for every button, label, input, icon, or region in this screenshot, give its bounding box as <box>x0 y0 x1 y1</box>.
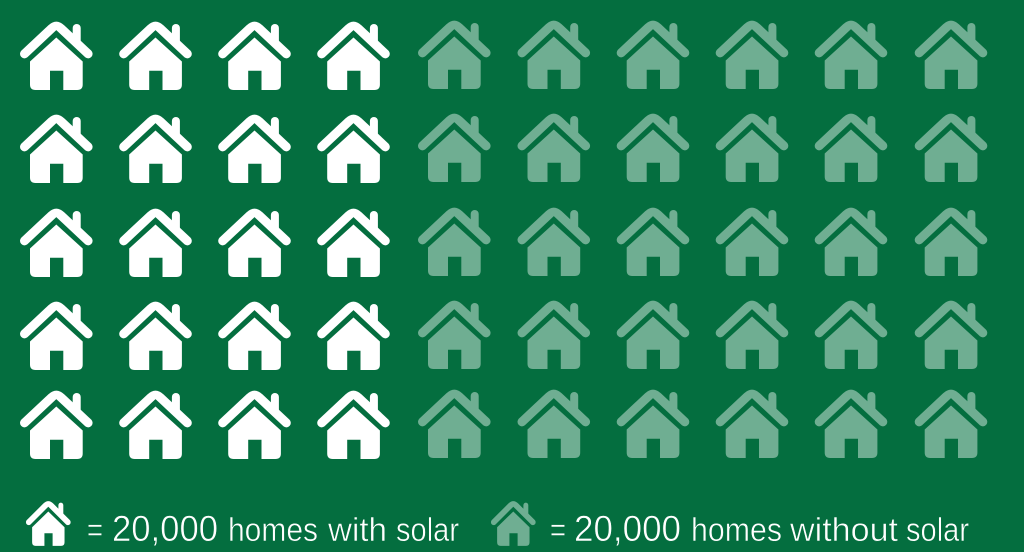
row 2 white houses <box>20 115 390 183</box>
legend label: with solar: 20,000 <box>112 508 218 549</box>
legend label: without solar: homes <box>691 511 782 548</box>
legend label: with solar: solar <box>396 511 459 548</box>
row 5 faded houses <box>418 390 987 458</box>
legend label: with solar: homes <box>228 511 318 548</box>
legend icon: home without solar <box>491 501 536 546</box>
row 1 white houses <box>20 22 390 90</box>
legend label: without solar <box>550 508 969 549</box>
row 4 white houses <box>20 302 390 370</box>
row 2 faded houses <box>418 114 987 182</box>
row 3 white houses <box>20 209 390 277</box>
legend label: with solar: with <box>327 511 387 548</box>
legend label: with solar <box>87 508 459 549</box>
icon grid: homes without solar <box>418 21 987 458</box>
row 3 faded houses <box>418 208 987 276</box>
icon grid: homes with solar <box>20 22 390 459</box>
legend label: with solar: = <box>87 511 103 548</box>
legend label: without solar: solar <box>906 511 969 548</box>
row 1 faded houses <box>418 21 987 89</box>
legend label: without solar: 20,000 <box>574 508 681 549</box>
row 5 white houses <box>20 391 390 459</box>
row 4 faded houses <box>418 301 987 369</box>
legend label: without solar: without <box>789 511 898 548</box>
legend icon: home with solar <box>26 501 71 546</box>
legend label: without solar: = <box>550 511 566 548</box>
